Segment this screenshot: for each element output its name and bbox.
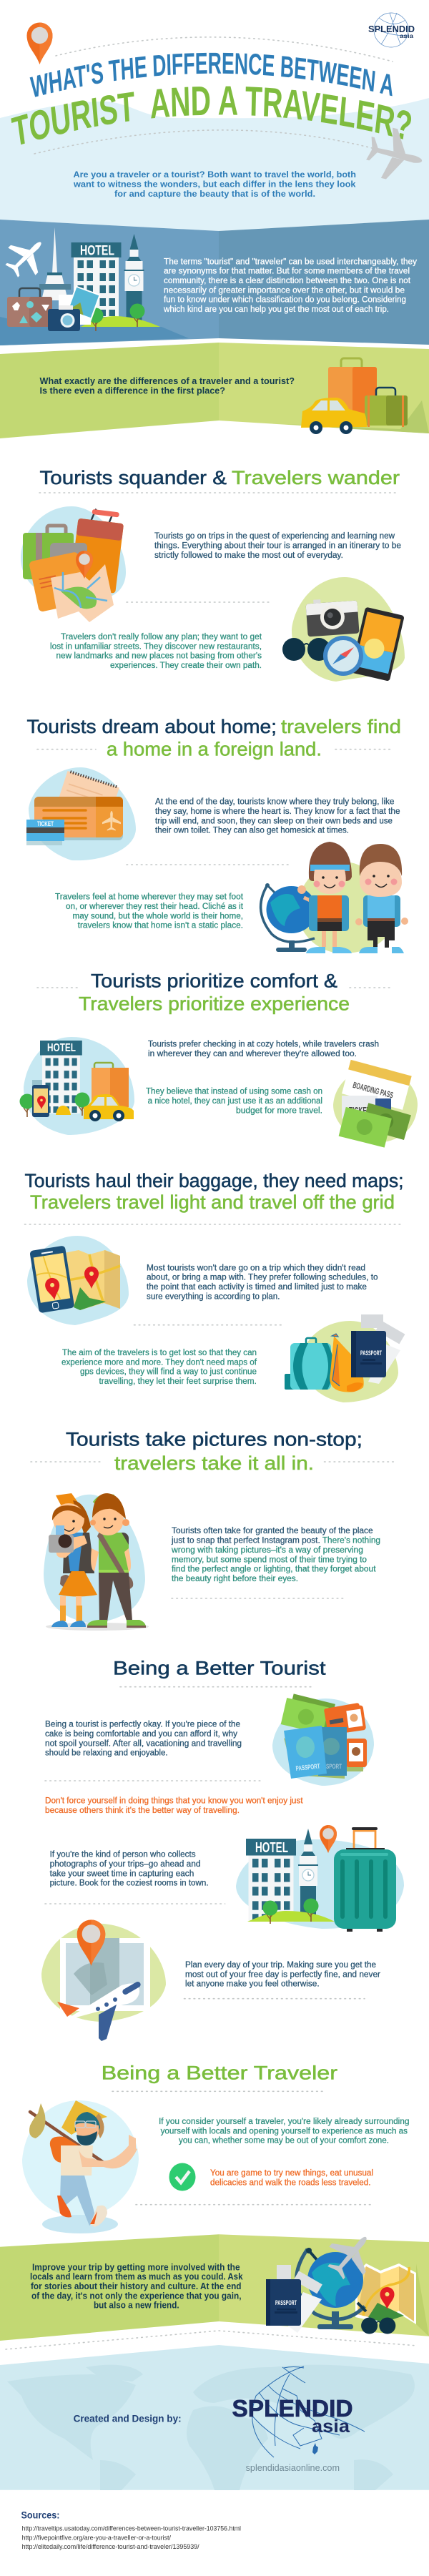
better tourist text 1: not spoil yourself. After all, vacationing and travelling xyxy=(45,1739,242,1748)
icon: camera xyxy=(48,305,80,331)
definition text: community, there is a clear distinction between the two. One is not xyxy=(164,277,411,285)
orange callout xyxy=(45,1797,303,1815)
tourist and traveler text 5: just to snap that perfect Instagram post. There's nothing xyxy=(171,1537,380,1545)
tourist text 4: Most tourists won't dare go on a trip which they didn't read xyxy=(147,1264,365,1272)
illustration: backpack and passport xyxy=(285,1314,405,1402)
illustration: globe, passport, map xyxy=(266,2223,429,2336)
logo: Splendid Asia footer: asia xyxy=(312,2417,350,2437)
icon: green check xyxy=(169,2163,196,2191)
orange callout: because others think it's the better way of travelling. xyxy=(45,1806,240,1815)
tourist text 3: Tourists prefer checking in at cozy hotels, while travelers crash xyxy=(148,1041,379,1049)
tourist text 2 xyxy=(155,798,400,835)
better traveler text xyxy=(159,2118,409,2145)
tourist and traveler text 5: wrong with taking pictures–it's a way of preserving xyxy=(171,1546,363,1555)
tourist text 1: Tourists go on trips in the quest of experiencing and learning new xyxy=(154,532,395,541)
illustration: map and plane xyxy=(41,1919,166,2041)
traveler text 1 xyxy=(50,633,262,670)
heading: tourists dream about home xyxy=(27,716,401,760)
tourist and traveler text 5: find the perfect angle or lighting, that they forget about xyxy=(172,1565,376,1574)
traveler text 1: Travelers don't really follow any plan; they want to get xyxy=(61,633,262,641)
better traveler text: If you consider yourself a traveler, you're likely already surrounding xyxy=(159,2118,409,2126)
tourist text 2: their own toilet. They can also get homesick at times. xyxy=(155,827,349,835)
better tourist text 2: If you're the kind of person who collects xyxy=(50,1851,196,1859)
traveler text 2: may sound, but the whole world is their home, xyxy=(73,912,243,920)
intro text: for and capture the beauty that is of the world. xyxy=(114,189,315,199)
illustration: tickets: TICKET xyxy=(37,820,54,827)
traveler text 4: gps devices, they will find a way to just continue xyxy=(80,1368,257,1377)
illustration: camera, phone, compass xyxy=(282,577,405,682)
closing text: Improve your trip by getting more involved with the xyxy=(32,2262,240,2272)
better tourist text 1: cake is being comfortable and you can afford it, why xyxy=(45,1730,237,1739)
traveler text 3: They believe that instead of using some cash on xyxy=(146,1088,322,1096)
tourist text 3: in wherever they can and wherever they're allowed too. xyxy=(148,1050,357,1058)
logo: Splendid Asia header xyxy=(368,13,415,47)
sources: http://fivepointfive.org/are-you-a-traveller-or-a-tourist/ xyxy=(22,2534,171,2542)
question text xyxy=(40,376,295,396)
tourist text 2: At the end of the day, tourists know where they truly belong, like xyxy=(155,798,395,807)
orange traveler callout: delicacies and walk the roads less traveled. xyxy=(210,2178,370,2187)
tourist text 4: the point that each activity is timed and limited just to make xyxy=(147,1283,367,1292)
illustration: backpack and passport: PASSPORT xyxy=(360,1350,382,1357)
decorative dotted flight path lower xyxy=(34,130,372,154)
better tourist text 2: picture. Book for the coziest rooms in town. xyxy=(50,1879,209,1888)
definition text: The terms "tourist" and "traveler" can be used interchangeably, they xyxy=(164,257,417,266)
person: boy with bag xyxy=(87,1493,146,1628)
illustration: boarding pass and money xyxy=(333,1060,418,1148)
closing text xyxy=(30,2262,243,2311)
illustration: suitcases and taxi xyxy=(301,358,408,434)
illustration: boarding pass and money: BOARDING PASS xyxy=(352,1080,395,1101)
title xyxy=(11,53,412,144)
illustration: boarding pass and money: TICKET xyxy=(349,1105,370,1117)
orange traveler callout: You are game to try new things, eat unusual xyxy=(210,2169,373,2178)
icon: white plane xyxy=(0,229,54,285)
icon: brown suitcase xyxy=(7,288,52,327)
kid: boy xyxy=(355,844,408,953)
better tourist text 2: photographs of your trips–go ahead and xyxy=(50,1860,200,1869)
icon: globe xyxy=(261,883,316,952)
traveler text 2: travelers know that home isn't a static place. xyxy=(78,922,243,930)
person: girl with camera xyxy=(49,1503,97,1627)
illustration: hotel and teal suitcase: HOTEL xyxy=(255,1840,288,1856)
traveler text 4 xyxy=(61,1349,257,1386)
better tourist text 1: Being a tourist is perfectly okay. If you're piece of the xyxy=(45,1720,240,1729)
traveler text 1: experiences. They create their own path. xyxy=(110,662,262,670)
question text: What exactly are the differences of a traveler and a tourist? xyxy=(40,376,295,386)
heading: tourists dream about home: a home in a foreign land. xyxy=(107,739,322,760)
traveler text 3 xyxy=(146,1088,322,1115)
heading: comfort and experience: Tourists prioritize comfort & xyxy=(91,970,337,992)
tourist text 2: trip will end, and soon, they can sleep on their own beds and use xyxy=(155,817,393,825)
illustration: phone and map xyxy=(27,1236,129,1325)
definition text: fun to know under which classification do you belong. Considering xyxy=(164,296,406,305)
decorative dotted flight path top xyxy=(56,37,393,62)
heading: pictures: travelers take it all in. xyxy=(114,1452,314,1474)
heading: tourists squander: Tourists squander & xyxy=(40,467,227,488)
tourist and traveler text 5: memory, but some spend most of their time trying to xyxy=(172,1555,367,1564)
icon: orange map pin xyxy=(27,23,53,64)
illustration: kids and globe xyxy=(261,842,408,953)
icon: big ben xyxy=(124,234,144,322)
panel: green question band xyxy=(0,343,429,438)
icon: hill and trees xyxy=(81,303,160,331)
tourist text 2: they say, home is where the heart is. They know for a fact that the xyxy=(155,807,400,816)
better tourist text 2: take your sweet time in capturing each xyxy=(50,1869,194,1878)
tourist text 4 xyxy=(147,1264,378,1301)
illustration: hotel, taxi, phone xyxy=(20,1037,134,1135)
better tourist text 3: let anyone make you feel otherwise. xyxy=(185,1980,320,1989)
definition text: which kind are you can help you get the most out of each trip. xyxy=(163,305,389,314)
panel: blue definition band xyxy=(0,220,429,345)
better tourist text 3: Plan every day of your trip. Making sure you get the xyxy=(185,1961,376,1970)
tourist text 1: strictly followed to make the most out of everyday. xyxy=(154,551,343,560)
heading: comfort and experience xyxy=(79,970,350,1015)
closing text: of the day, it's not only the experience that you gain, xyxy=(31,2291,242,2301)
traveler text 3: a nice hotel, they can just use it as an additional xyxy=(148,1097,322,1106)
illustration: landmarks and luggage xyxy=(0,227,160,331)
better traveler text: yourself with locals and opening yourself to experience as much as xyxy=(161,2127,408,2135)
illustration: globe, passport, map: PASSPORT xyxy=(275,2299,297,2306)
traveler text 4: travelling, they let their feet surprise them. xyxy=(99,1377,257,1386)
panel: footer map band xyxy=(0,2345,429,2490)
title: WHAT'S THE DIFFERENCE BETWEEN A xyxy=(30,53,393,97)
logo: Splendid Asia footer xyxy=(232,2366,365,2473)
illustration: couple with camera xyxy=(44,1493,149,1631)
sources xyxy=(21,2509,241,2551)
tourist text 1: things. Everything about their tour is arranged in an itinerary to be xyxy=(154,542,401,551)
title: TOURIST AND A TRAVELER? xyxy=(11,86,412,144)
heading: tourists dream about home: travelers find xyxy=(281,716,401,737)
illustration: hotel and teal suitcase xyxy=(236,1825,404,1932)
heading: being a better traveler: Being a Better Traveler xyxy=(102,2062,337,2083)
tourist and traveler text 5: the beauty right before their eyes. xyxy=(172,1575,298,1583)
decorative dotted footer line xyxy=(6,2331,418,2349)
icon: photo xyxy=(59,285,101,325)
sources: http://traveltips.usatoday.com/differences-between-tourist-traveller-103756.html xyxy=(22,2525,241,2533)
heading: baggage and maps: Tourists haul their baggage, they need maps; xyxy=(24,1170,403,1191)
background: hero sky xyxy=(0,98,429,231)
tourist text 3 xyxy=(148,1041,379,1058)
panel: green closing band xyxy=(0,2234,429,2341)
traveler text 2: Travelers feel at home wherever they may set foot xyxy=(55,893,244,902)
better tourist text 1 xyxy=(45,1720,242,1758)
intro text xyxy=(73,169,356,199)
illustration: backpacker xyxy=(22,2100,139,2233)
definition text xyxy=(163,257,417,314)
orange traveler callout xyxy=(210,2169,373,2187)
traveler text 2 xyxy=(55,893,244,930)
heading: being a better tourist: Being a Better Tourist xyxy=(113,1658,326,1679)
icon: eiffel tower xyxy=(39,227,71,300)
traveler text 3: budget for more travel. xyxy=(236,1106,322,1115)
tourist text 4: sure everything is according to plan. xyxy=(147,1292,280,1301)
better tourist text 3 xyxy=(185,1961,380,1989)
better tourist text 3: most out of your free day is perfectly fine, and never xyxy=(185,1970,380,1979)
orange callout: Don't force yourself in doing things that you know you won't enjoy just xyxy=(45,1797,303,1806)
sources: Sources: xyxy=(21,2509,60,2521)
heading: baggage and maps: Travelers travel light and travel off the grid xyxy=(30,1191,395,1213)
traveler text 1: new landmarks and new places not basing from other's xyxy=(56,652,262,661)
illustration: luggage and map xyxy=(21,506,126,622)
kid: girl xyxy=(297,842,352,953)
illustration: passports and money: PASSPORT xyxy=(295,1762,320,1773)
tourist text 1 xyxy=(154,532,401,560)
icon: hotel: HOTEL xyxy=(80,243,114,259)
illustration: hotel, taxi, phone: HOTEL xyxy=(47,1042,76,1054)
traveler text 1: lost in unfamiliar streets. They discover new restaurants, xyxy=(50,642,262,651)
tourist text 4: about, or bring a map with. They prefer following schedules, to xyxy=(147,1274,378,1282)
heading: pictures xyxy=(66,1429,363,1474)
icon: grey airplane xyxy=(363,124,428,186)
credit text: Created and Design by: xyxy=(74,2413,182,2424)
heading: tourists squander: Travelers wander xyxy=(232,467,400,488)
better traveler text: you can, whether some may be out of your comfort zone. xyxy=(179,2137,389,2145)
logo: Splendid Asia footer: splendidasiaonline.com xyxy=(246,2462,340,2473)
traveler text 4: experience more and more. They don't need maps of xyxy=(61,1358,257,1367)
better tourist text 2 xyxy=(50,1851,209,1888)
definition text: necessarily of greater importance over the other, but it would be xyxy=(164,286,405,295)
definition text: are synonyms for that matter. But for some members of the travel xyxy=(164,267,410,276)
closing text: locals and learn from them as much as you could. Ask xyxy=(30,2272,243,2282)
closing text: for stories about their history and culture. At the end xyxy=(31,2281,242,2291)
intro text: want to witness the wonders, but each differ in the lens they look xyxy=(73,179,356,189)
traveler text 2: on, or wherever they rest their head. Cliché as it xyxy=(66,903,244,911)
intro text: Are you a traveler or a tourist? Both want to travel the world, both xyxy=(73,169,356,180)
logo: Splendid Asia header: asia xyxy=(400,33,414,39)
heading: baggage and maps xyxy=(24,1170,403,1213)
heading: tourists dream about home: Tourists dream about home; xyxy=(27,716,277,737)
tourist and traveler text 5 xyxy=(171,1527,380,1583)
question text: Is there even a difference in the first place? xyxy=(40,386,225,396)
illustration: passports and money: SPORT xyxy=(326,1763,342,1771)
icon: hotel xyxy=(72,242,122,317)
heading: comfort and experience: Travelers prioritize experience xyxy=(79,993,350,1015)
traveler text 4: The aim of the travelers is to get lost so that they can xyxy=(62,1349,257,1357)
heading: tourists squander xyxy=(40,467,400,488)
tourist and traveler text 5: Tourists often take for granted the beauty of the place xyxy=(172,1527,373,1535)
heading: pictures: Tourists take pictures non-stop; xyxy=(66,1429,363,1450)
closing text: but also a new friend. xyxy=(94,2301,179,2311)
better tourist text 1: should be relaxing and enjoyable. xyxy=(45,1749,168,1758)
illustration: passports and money xyxy=(272,1693,374,1786)
sources: http://elitedaily.com/life/difference-tourist-and-traveler/1395939/ xyxy=(22,2543,199,2551)
logo: Splendid Asia footer: SPLENDID xyxy=(232,2395,353,2422)
illustration: tickets xyxy=(26,767,136,860)
logo: Splendid Asia header: SPLENDID xyxy=(368,24,415,34)
